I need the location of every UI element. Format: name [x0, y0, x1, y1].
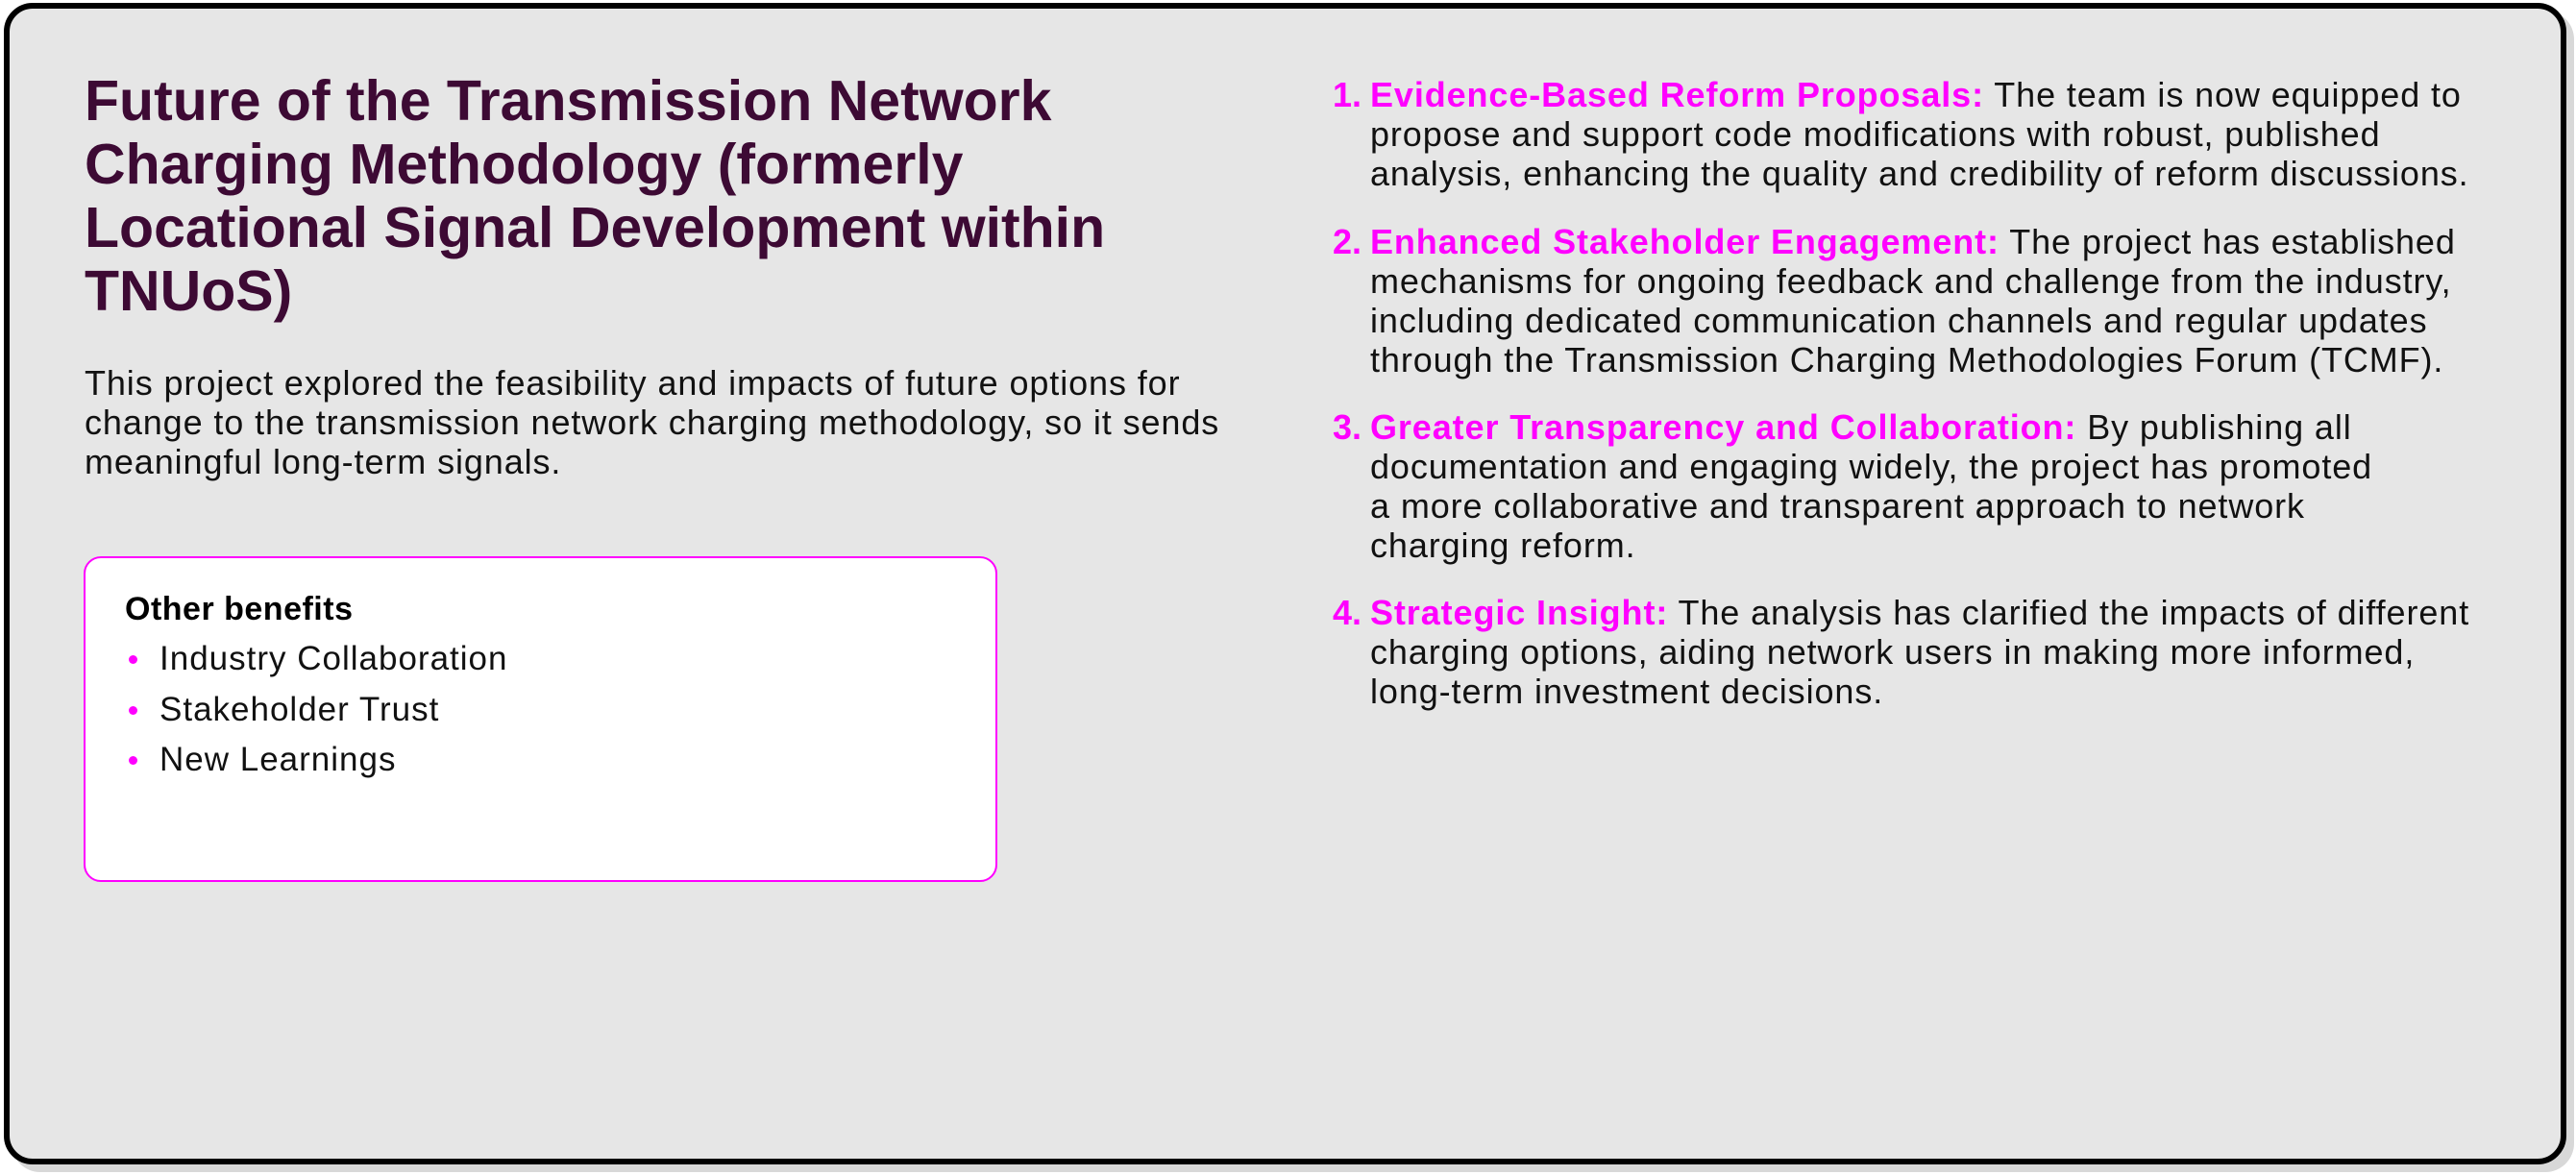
- bullet list: Stakeholder Trust: [159, 690, 439, 728]
- list item 2: [1333, 222, 2456, 379]
- title: Locational Signal Development within: [85, 196, 1105, 259]
- list item 1: 1.: [1333, 75, 1362, 114]
- list item 1: [1333, 75, 2469, 193]
- title: [85, 69, 1105, 323]
- list item 4: 4.: [1333, 593, 1362, 632]
- list item 2: including dedicated communication channels and regular updates: [1370, 301, 2427, 340]
- bullet list: Industry Collaboration: [159, 640, 507, 677]
- intro paragraph: meaningful long-term signals.: [85, 442, 561, 481]
- list item 1: propose and support code modifications with robust, published: [1370, 114, 2381, 154]
- title: TNUoS): [85, 259, 292, 323]
- title: Charging Methodology (formerly: [85, 133, 963, 196]
- intro paragraph: [85, 363, 1219, 481]
- list item 4: [1333, 593, 2469, 711]
- heading: other benefits: Other benefits: [125, 591, 353, 627]
- bullet list: [129, 640, 507, 778]
- list item 3: Greater Transparency and Collaboration: By publishing all: [1370, 407, 2352, 447]
- intro paragraph: This project explored the feasibility and impacts of future options for: [85, 363, 1180, 403]
- list item 3: 3.: [1333, 407, 1362, 447]
- list item 2: Enhanced Stakeholder Engagement: The project has established: [1370, 222, 2456, 261]
- list item 2: 2.: [1333, 222, 1362, 261]
- list item 1: analysis, enhancing the quality and credibility of reform discussions.: [1370, 154, 2469, 193]
- title: Future of the Transmission Network: [85, 69, 1051, 133]
- list item 4: charging options, aiding network users in making more informed,: [1370, 632, 2415, 672]
- panel: other benefits: [84, 556, 997, 882]
- list item 3: [1333, 407, 2372, 565]
- list item 3: a more collaborative and transparent approach to network: [1370, 486, 2305, 526]
- list item 2: through the Transmission Charging Methodologies Forum (TCMF).: [1370, 340, 2443, 379]
- bullet list: New Learnings: [159, 741, 396, 778]
- list item 4: long-term investment decisions.: [1370, 672, 1883, 711]
- list item 3: charging reform.: [1370, 526, 1636, 565]
- list item 2: mechanisms for ongoing feedback and challenge from the industry,: [1370, 261, 2452, 301]
- intro paragraph: change to the transmission network charging methodology, so it sends: [85, 403, 1219, 442]
- list item 4: Strategic Insight: The analysis has clarified the impacts of different: [1370, 593, 2469, 632]
- list item 3: documentation and engaging widely, the project has promoted: [1370, 447, 2372, 486]
- list item 1: Evidence-Based Reform Proposals: The team is now equipped to: [1370, 75, 2462, 114]
